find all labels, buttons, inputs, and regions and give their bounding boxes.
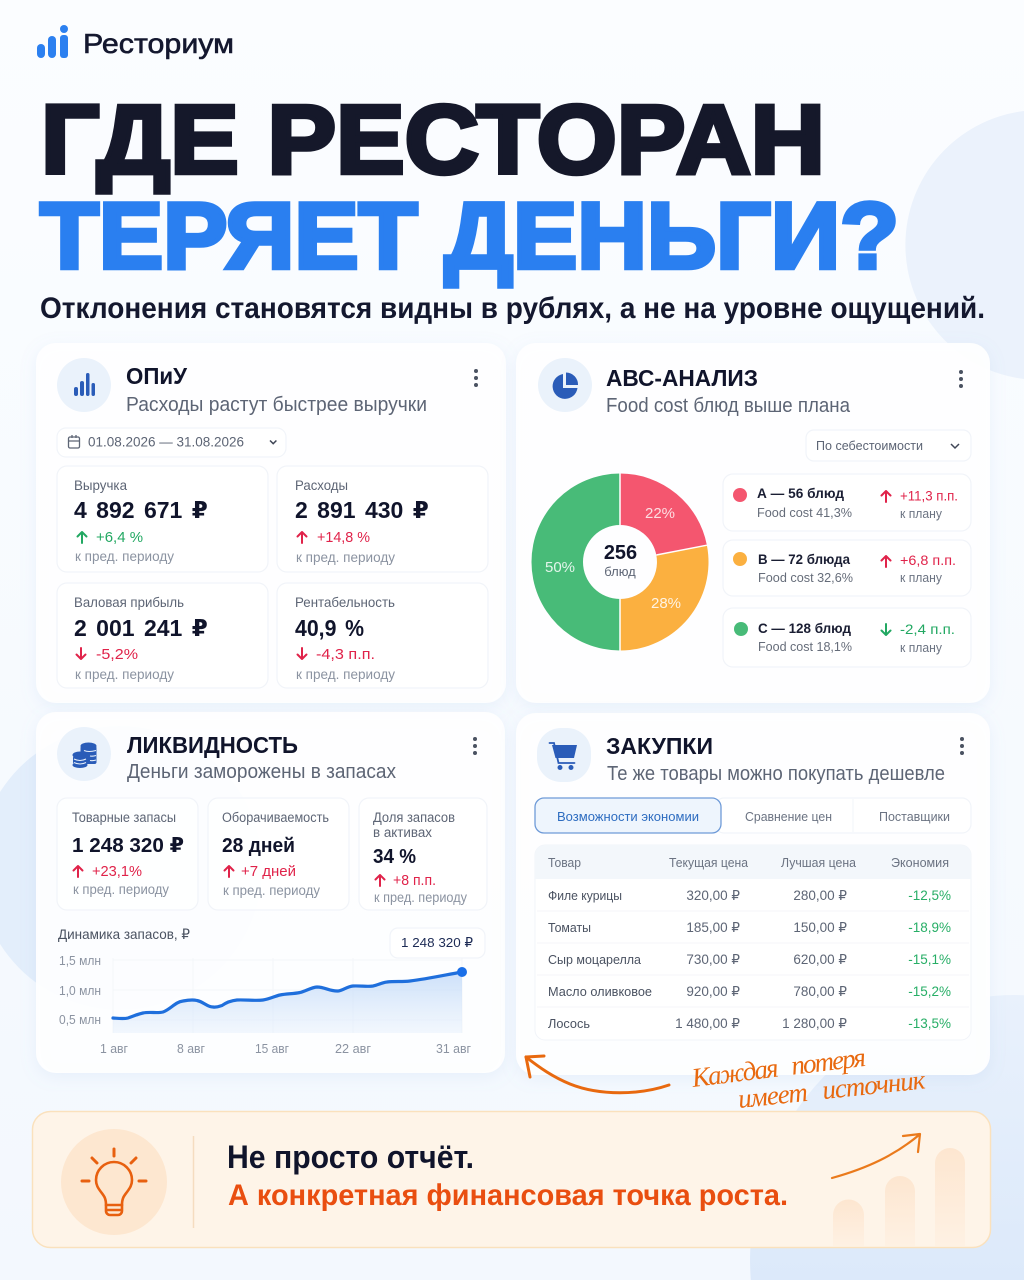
callout: handwritten note: Каждая потеря	[689, 1042, 867, 1093]
date picker	[57, 428, 286, 457]
panel: ABC-анализ	[516, 343, 990, 703]
legend row A: Food cost 41,3%	[757, 505, 852, 520]
stat: валовая прибыль: Валовая прибыль	[74, 594, 184, 610]
heading: ОПиУ	[126, 363, 188, 389]
stat: выручка: 4 892 671 ₽	[74, 497, 208, 523]
stat: расходы: Расходы	[295, 477, 348, 493]
subheading: Деньги заморожены в запасах	[127, 761, 396, 783]
callout: handwritten note: имеет источник	[736, 1064, 927, 1114]
line chart: динамика запасов: 8 авг	[177, 1041, 205, 1056]
table: сравнение цен: 320,00 ₽	[686, 888, 740, 903]
stat: доля запасов: в активах	[373, 825, 432, 840]
stat: доля запасов: к пред. периоду	[374, 889, 467, 905]
line chart: динамика запасов: Динамика запасов, ₽	[58, 926, 190, 942]
donut chart: 50%	[545, 559, 575, 576]
stat: выручка	[57, 466, 268, 572]
stat: валовая прибыль	[57, 583, 268, 688]
stat: рентабельность: -4,3 п.п.	[316, 646, 375, 663]
donut chart: 22%	[645, 505, 675, 522]
legend row C: -2,4 п.п.	[900, 621, 955, 637]
stat: рентабельность: 40,9 %	[295, 615, 364, 641]
donut chart	[532, 473, 709, 651]
legend row A: А — 56 блюд	[757, 485, 844, 501]
table: сравнение цен: Товар	[548, 855, 581, 870]
table: сравнение цен: 920,00 ₽	[686, 984, 740, 999]
divider	[192, 1136, 194, 1228]
donut chart: 28%	[651, 595, 681, 612]
arrow: growth	[832, 1134, 920, 1178]
table: сравнение цен: Сыр моцарелла	[548, 952, 642, 967]
table: сравнение цен: Томаты	[548, 920, 591, 935]
icon: light bulb	[61, 1129, 167, 1235]
tabs: Сравнение цен	[745, 809, 832, 824]
tabs: Поставщики	[879, 809, 950, 824]
arrow: handwritten pointer	[526, 1056, 669, 1093]
legend row C	[723, 608, 971, 667]
date picker: 01.08.2026 — 31.08.2026	[88, 434, 244, 450]
table: сравнение цен: -18,9%	[908, 920, 951, 935]
icon: bar chart	[57, 358, 111, 412]
stat: расходы	[277, 466, 488, 572]
table: сравнение цен: Лучшая цена	[781, 855, 857, 870]
logo	[37, 25, 234, 59]
legend row C: С — 128 блюд	[758, 620, 851, 636]
menu dots	[473, 737, 477, 755]
stat: доля запасов	[359, 798, 487, 910]
stat: выручка: к пред. периоду	[75, 548, 174, 564]
legend row B	[723, 540, 971, 596]
callout: handwritten note	[689, 1042, 927, 1114]
legend row A: к плану	[900, 506, 942, 521]
tabs: Возможности экономии	[557, 809, 699, 824]
line chart: динамика запасов: 15 авг	[255, 1041, 289, 1056]
stat: оборачиваемость: +7 дней	[241, 863, 296, 880]
legend row C: Food cost 18,1%	[758, 639, 852, 654]
stat: выручка: Выручка	[74, 477, 127, 493]
menu dots	[960, 737, 964, 755]
panel: ОПиУ	[36, 343, 506, 703]
stat: валовая прибыль: 2 001 241 ₽	[74, 615, 208, 641]
line chart: динамика запасов: 1,0 млн	[59, 983, 101, 998]
subheading: Те же товары можно покупать дешевле	[607, 763, 945, 785]
stat: оборачиваемость: 28 дней	[222, 835, 295, 857]
stat: товарные запасы	[57, 798, 198, 910]
menu dots	[474, 369, 478, 387]
line chart: динамика запасов	[58, 926, 485, 1056]
stat: товарные запасы: +23,1%	[92, 863, 142, 880]
line chart: динамика запасов: 1 авг	[100, 1041, 128, 1056]
stat: товарные запасы: к пред. периоду	[73, 881, 169, 897]
stat: рентабельность	[277, 583, 488, 688]
table: сравнение цен: 1 280,00 ₽	[782, 1016, 847, 1031]
table: сравнение цен: Филе курицы	[548, 888, 622, 903]
stat: выручка: +6,4 %	[96, 529, 143, 546]
stat: доля запасов: +8 п.п.	[393, 872, 436, 889]
banner	[32, 1112, 990, 1248]
subtitle: Отклонения становятся видны в рублях, а не на уровне ощущений.	[40, 292, 985, 325]
icon: cart	[537, 728, 591, 782]
donut chart: блюд	[604, 564, 636, 579]
table: сравнение цен: 150,00 ₽	[793, 920, 847, 935]
subheading: Расходы растут быстрее выручки	[126, 394, 427, 416]
line chart: динамика запасов: 22 авг	[335, 1041, 371, 1056]
brand name: Ресториум	[83, 28, 234, 59]
stat: рентабельность: к пред. периоду	[296, 666, 395, 682]
stat: рентабельность: Рентабельность	[295, 594, 395, 610]
banner accent text: А конкретная финансовая точка роста.	[228, 1179, 788, 1212]
legend row C: к плану	[900, 640, 942, 655]
table: сравнение цен: -13,5%	[908, 1016, 951, 1031]
stat: оборачиваемость: Оборачиваемость	[222, 810, 329, 825]
stat: расходы: к пред. периоду	[296, 549, 395, 565]
line chart: динамика запасов: 0,5 млн	[59, 1012, 101, 1027]
stat: оборачиваемость: к пред. периоду	[223, 882, 320, 898]
donut chart: 256	[604, 542, 637, 564]
dropdown	[806, 430, 971, 461]
table: сравнение цен	[535, 845, 971, 1040]
stat: товарные запасы: 1 248 320 ₽	[72, 835, 184, 857]
menu dots	[959, 370, 963, 388]
panel: ликвидность	[36, 712, 505, 1073]
table: сравнение цен: 185,00 ₽	[686, 920, 740, 935]
stat: оборачиваемость	[208, 798, 349, 910]
table: сравнение цен: Масло оливковое	[548, 984, 652, 999]
stat: доля запасов: 34 %	[373, 846, 416, 868]
table: сравнение цен: 730,00 ₽	[686, 952, 740, 967]
table: сравнение цен: Лосось	[548, 1016, 590, 1031]
icon: coin stacks	[57, 727, 111, 781]
legend row B: +6,8 п.п.	[900, 552, 956, 568]
subheading: Food cost блюд выше плана	[606, 395, 851, 417]
title: ТЕРЯЕТ ДЕНЬГИ?	[40, 183, 899, 288]
table: сравнение цен: -15,2%	[908, 984, 951, 999]
title	[40, 85, 899, 288]
stat: доля запасов: Доля запасов	[373, 810, 455, 825]
icon: pie chart	[538, 358, 592, 412]
dropdown: По себестоимости	[816, 438, 923, 453]
legend row A	[723, 474, 971, 531]
heading: АВС-АНАЛИЗ	[606, 365, 758, 391]
line chart: динамика запасов: 1,5 млн	[59, 953, 101, 968]
table: сравнение цен: -12,5%	[908, 888, 951, 903]
legend row B: В — 72 блюда	[758, 551, 850, 567]
stat: расходы: 2 891 430 ₽	[295, 497, 429, 523]
stat: валовая прибыль: к пред. периоду	[75, 666, 174, 682]
icon: logo bars	[37, 25, 68, 58]
line chart: динамика запасов: 1 248 320 ₽	[401, 935, 473, 950]
legend row B: Food cost 32,6%	[758, 570, 853, 585]
legend row B: к плану	[900, 570, 942, 585]
stat: валовая прибыль: -5,2%	[96, 646, 138, 663]
table: сравнение цен: Экономия	[891, 855, 949, 870]
table: сравнение цен: -15,1%	[908, 952, 951, 967]
heading: ЛИКВИДНОСТЬ	[127, 732, 298, 758]
line chart: динамика запасов: 31 авг	[436, 1041, 471, 1056]
heading: ЗАКУПКИ	[606, 733, 713, 759]
tabs	[535, 798, 971, 833]
title: ГДЕ РЕСТОРАН	[41, 85, 825, 194]
stat: товарные запасы: Товарные запасы	[72, 810, 176, 825]
chart: growth bars	[833, 1148, 965, 1246]
table: сравнение цен: 280,00 ₽	[793, 888, 847, 903]
stat: расходы: +14,8 %	[317, 529, 370, 546]
banner headline: Не просто отчёт.	[227, 1139, 474, 1175]
panel: закупки	[516, 713, 990, 1075]
table: сравнение цен: 620,00 ₽	[793, 952, 847, 967]
table: сравнение цен: 1 480,00 ₽	[675, 1016, 740, 1031]
table: сравнение цен: Текущая цена	[669, 855, 749, 870]
table: сравнение цен: 780,00 ₽	[793, 984, 847, 999]
legend row A: +11,3 п.п.	[900, 488, 958, 504]
